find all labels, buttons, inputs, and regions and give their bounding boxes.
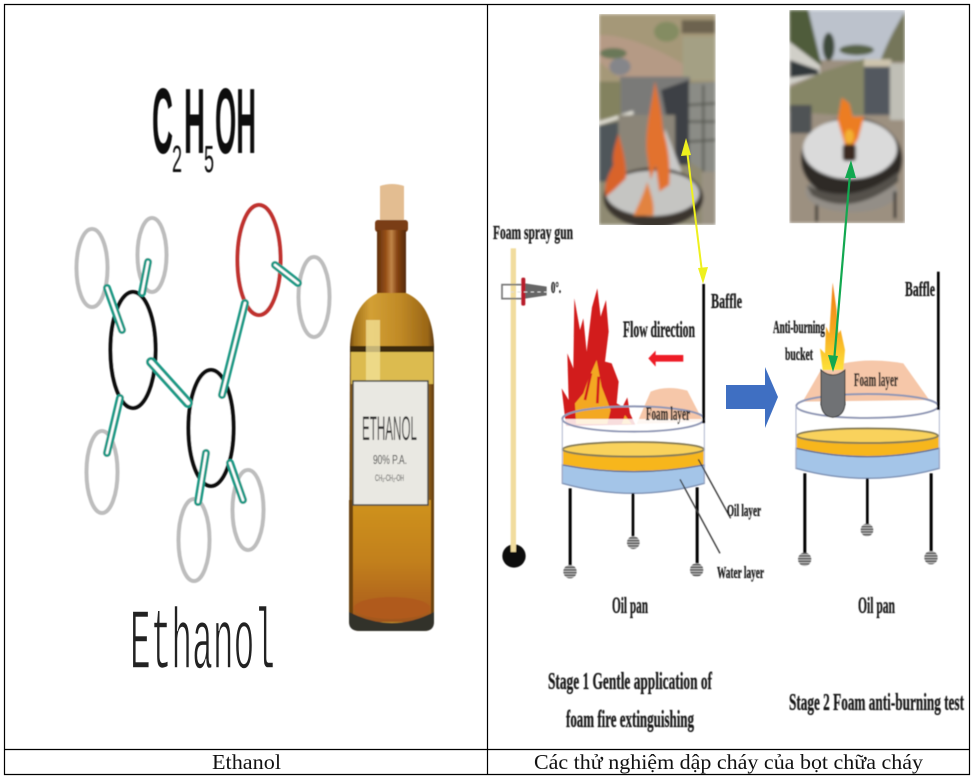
chemical formula C2H5OH: 5 xyxy=(204,139,214,181)
caption: stage 1 second line: foam fire extinguishing xyxy=(566,707,694,733)
chemical formula C2H5OH: H xyxy=(184,69,205,173)
ethanol molecule diagram xyxy=(76,205,330,581)
foam layer mound xyxy=(637,388,703,424)
caption: foam fire suppression tests: Các thử nghiệm dập cháy của bọt chữa cháy xyxy=(534,750,924,774)
panel: ethanol molecule and bottle: OH xyxy=(215,69,256,173)
label: foam spray gun: Foam spray gun xyxy=(493,222,573,244)
photo: stage 2 anti-burning test xyxy=(789,10,905,223)
foam spray gun xyxy=(502,248,548,568)
label: nozzle angle: 0°. xyxy=(551,278,561,297)
layer pointer lines xyxy=(680,459,731,553)
label: flow direction: Flow direction xyxy=(623,317,695,342)
baffle xyxy=(702,284,705,423)
diagram: stage 2 foam anti-burning xyxy=(773,272,964,716)
baffle xyxy=(937,272,940,410)
panel: foam fire extinguishing tests xyxy=(488,5,968,748)
label: baffle stage 1: Baffle xyxy=(711,289,742,313)
diagram: stage 2 foam anti-burning: Foam layer xyxy=(854,370,898,391)
diagram: stage 1 gentle application: Oil pan xyxy=(612,593,648,618)
label: anti-burning: Anti-burning xyxy=(773,317,825,337)
yellow double arrow linking photo and stage 1 xyxy=(681,138,708,284)
red flow arrow xyxy=(648,351,683,367)
pan legs xyxy=(563,487,703,578)
caption: Ethanol: Ethanol xyxy=(212,750,281,774)
ethanol bottle xyxy=(349,184,434,631)
flames xyxy=(562,288,635,426)
panel: ethanol molecule and bottle xyxy=(5,5,486,748)
panel: ethanol molecule and bottle: Ethanol xyxy=(130,596,275,694)
anti-burning bucket xyxy=(821,370,845,417)
chemical formula C2H5OH: C xyxy=(152,69,173,173)
label: oil pan stage 2: Oil pan xyxy=(858,593,895,618)
foam layer mound xyxy=(803,361,929,402)
label: bucket: bucket xyxy=(785,344,813,364)
pan with oil and water layers xyxy=(796,394,939,478)
label: oil layer: Oil layer xyxy=(727,501,761,520)
panel: ethanol molecule and bottle: ETHANOL xyxy=(362,410,417,448)
block arrow between stages xyxy=(726,367,778,428)
caption: stage 1: Stage 1 Gentle application of xyxy=(548,669,713,695)
bottle label: 90% P.A. xyxy=(373,452,407,467)
chemical formula C2H5OH: 2 xyxy=(172,139,182,181)
pan with oil and water layers xyxy=(562,406,704,493)
green double arrow linking photo and stage 2 xyxy=(828,160,856,372)
chemical formula C2H5OH xyxy=(152,69,256,181)
label: baffle stage 2: Baffle xyxy=(905,277,935,301)
bottle label: CH₃-CH₂-OH xyxy=(375,473,404,483)
pan legs xyxy=(798,473,938,566)
diagram: stage 1 gentle application: Foam layer xyxy=(646,404,690,425)
anti-burning bucket flame xyxy=(820,283,845,370)
label: water layer: Water layer xyxy=(717,563,764,582)
photo: stage 1 fire test xyxy=(599,14,716,228)
diagram: stage 1 gentle application xyxy=(493,222,764,733)
bottle label xyxy=(353,381,428,505)
